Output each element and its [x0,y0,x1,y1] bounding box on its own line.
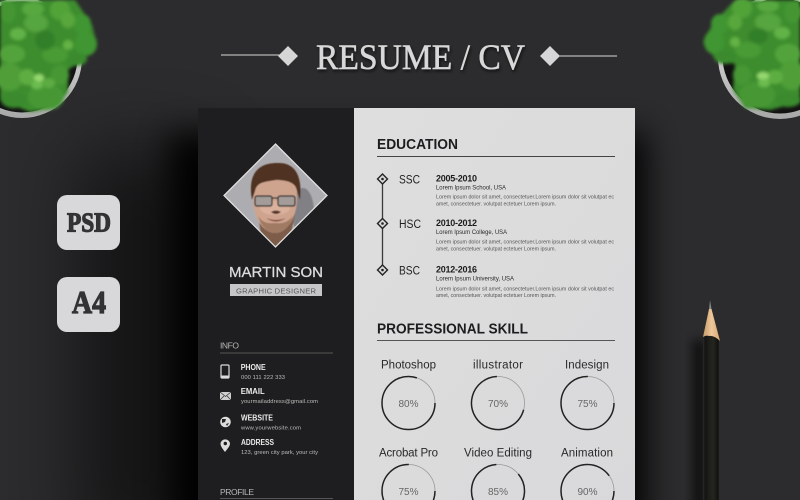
plant: top left [0,0,97,118]
heading: info: INFO [220,340,239,350]
education entry: SSC: Lorem Ipsum School, USA [436,184,507,191]
plant: top right [703,0,800,119]
contact: email: yourmailaddress@gmail.com [241,399,318,405]
skill: Video Editing 85% [461,448,535,500]
skill: Photoshop 80%: Photoshop [381,360,436,372]
contact: address [241,438,318,456]
name: MARTIN SON [229,264,323,281]
badge: A4: A4 [72,284,106,320]
skill: Acrobat Pro 75% [379,448,438,500]
skill: Photoshop 80% [381,360,436,430]
badge: PSD: PSD [67,208,111,238]
badge: PSD [57,195,120,250]
heading: profile [220,487,333,498]
icon: website globe [220,417,231,427]
contact: phone [241,363,285,381]
job title tag [230,284,322,296]
skill: Photoshop 80%: 80% [398,399,419,410]
education entry: SSC: SSC [399,174,420,186]
education entry: BSC: amet, consectetuer. volutpat ectetuer Lorem ipsum. [436,293,556,299]
education entry: SSC: amet, consectetuer. volutpat ectetuer Lorem ipsum. [436,202,556,208]
skill: Indesign 75%: 75% [577,399,598,410]
skill: Video Editing 85%: Video Editing [464,448,532,460]
pencil [692,300,720,500]
title: RESUME / CV [316,37,525,77]
skill: Indesign 75%: Indesign [565,360,609,372]
education entry: BSC: BSC [399,265,420,277]
education entry: SSC [399,173,614,208]
contact: address: 123, green city park, your city [241,450,318,456]
education entry: HSC: 2010-2012 [436,218,477,228]
education entry: BSC: 2012-2016 [436,264,477,274]
profile photo [224,144,327,250]
heading: info [220,340,333,353]
education entry: HSC [399,218,614,252]
education entry: BSC: Lorem ipsum dolor sit amet, consectetuer.Lorem ipsum dolor sit volutpat ec [436,286,614,292]
education entry: SSC: Lorem ipsum dolor sit amet, consectetuer.Lorem ipsum dolor sit volutpat ec [436,195,614,201]
skill: Acrobat Pro 75%: Acrobat Pro [379,448,438,460]
skill: Video Editing 85%: 85% [488,487,508,498]
resume paper [198,108,635,500]
paper: right panel [354,108,635,500]
contact: address: ADDRESS [241,438,275,447]
skill: illustrator 70% [466,360,530,435]
education entry: HSC: HSC [399,219,421,231]
contact: website: WEBSITE [241,414,274,423]
timeline [378,174,388,275]
panel: sidebar [198,108,354,500]
skill: illustrator 70%: illustrator [473,360,523,372]
heading: profile: PROFILE [220,487,254,497]
job title tag: GRAPHIC DESIGNER [236,286,317,296]
contact: website: www.yourwebsite.com [240,425,301,431]
heading: education: EDUCATION [377,137,458,153]
badge: A4 [57,277,120,332]
skill: Acrobat Pro 75%: 75% [398,487,419,498]
education entry: BSC [399,264,614,299]
skill: Animation 90% [561,448,614,500]
contact: website [240,414,301,431]
contact: phone: PHONE [241,363,266,372]
heading: professional skill: PROFESSIONAL SKILL [377,322,528,338]
icon: address pin [220,439,230,452]
education entry: SSC: 2005-2010 [436,173,477,183]
contact: email: EMAIL [241,387,265,396]
education entry: HSC: amet, consectetuer. volutpat ectetuer Lorem ipsum. [436,246,556,252]
icon: email [220,392,231,400]
education entry: BSC: Lorem Ipsum University, USA [436,275,515,282]
icon: phone [221,365,229,378]
skill: illustrator 70%: 70% [488,399,508,410]
title [221,37,617,77]
skill: Animation 90%: Animation [561,448,613,460]
contact: email [241,387,318,405]
contact: phone: 000 111 222 333 [241,375,285,381]
education entry: HSC: Lorem Ipsum College, USA [436,229,508,236]
education entry: HSC: Lorem ipsum dolor sit amet, consectetuer.Lorem ipsum dolor sit volutpat ec [436,240,614,246]
skill: Animation 90%: 90% [577,487,598,498]
skill: Indesign 75% [561,360,614,430]
